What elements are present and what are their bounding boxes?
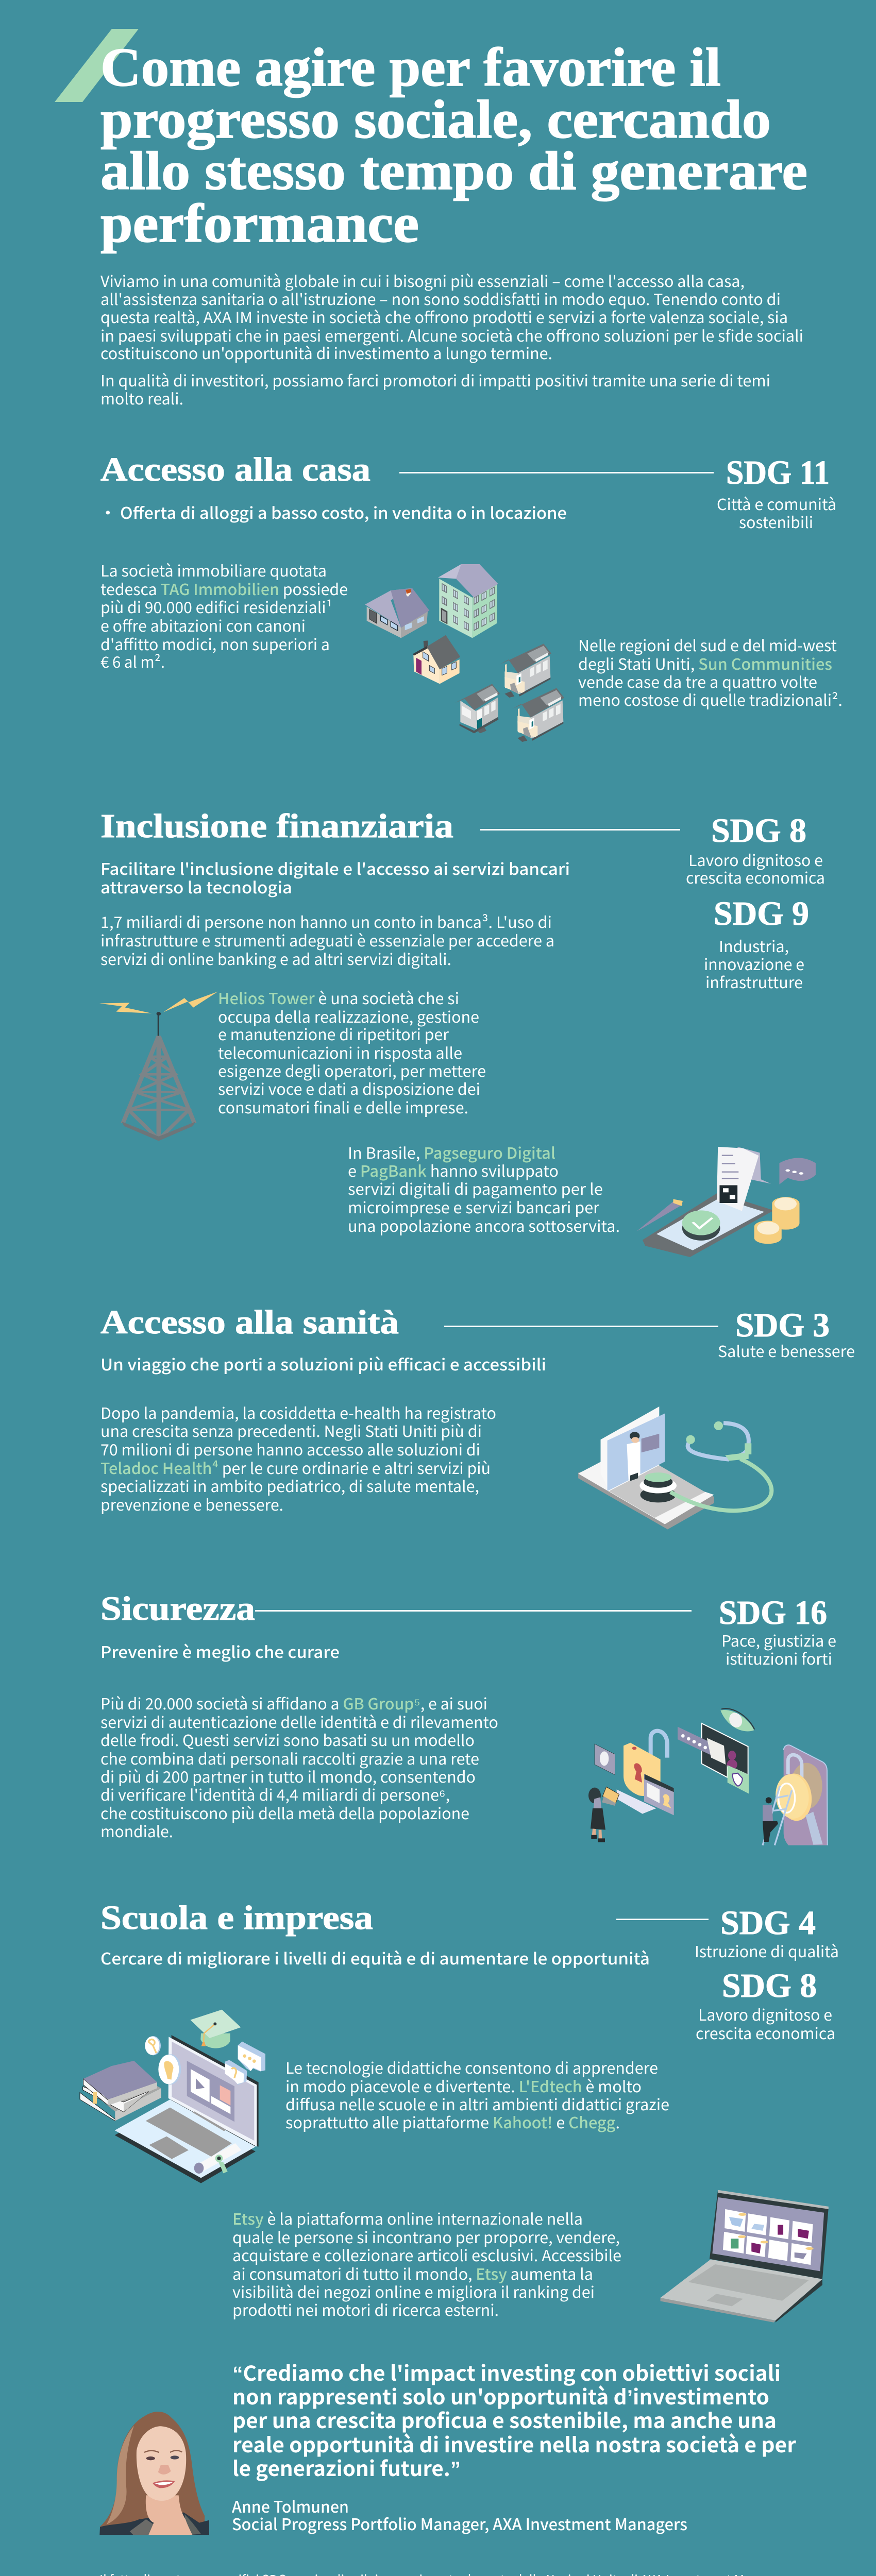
text block: Etsy: Etsy è la piattaforma online internazionale nella xyxy=(232,2207,583,2229)
text block: intro: servizi di online banking e ad altri servizi digitali. xyxy=(100,947,451,970)
text block: Pagseguro: e PagBank hanno sviluppato xyxy=(348,1159,559,1181)
tiny houses xyxy=(499,643,551,698)
quote text: per una crescita proficua e sostenibile, ma anche una xyxy=(232,2404,777,2434)
text block: Etsy xyxy=(232,2207,621,2320)
heading: Scuola e impresa xyxy=(100,1899,373,1937)
title xyxy=(100,37,807,253)
text block: TAG Immobilien xyxy=(100,558,348,672)
icon: houses xyxy=(365,564,564,742)
text block: Etsy: ai consumatori di tutto il mondo, Etsy aumenta la xyxy=(232,2262,593,2284)
text block: Teladoc Health⁴ per le cure ordinarie e altri servizi più xyxy=(100,1456,491,1479)
eye xyxy=(720,1710,754,1731)
text block: una crescita senza precedenti. Negli Stati Uniti più di xyxy=(100,1419,482,1442)
text block: edtech: Le tecnologie didattiche consentono di apprendere xyxy=(285,2056,658,2078)
title: Come agire per favorire il xyxy=(100,37,721,97)
sdg label: Città e comunità xyxy=(717,492,836,515)
text block: edtech: soprattutto alle piattaforme Kahoot! e Chegg. xyxy=(285,2110,620,2133)
sdg label: sostenibili xyxy=(739,510,813,533)
books xyxy=(80,2093,115,2121)
text block: Sun Communities xyxy=(578,633,843,710)
quote text: reale opportunità di investire nella nostra società e per xyxy=(232,2429,797,2459)
text block: Più di 20.000 società si affidano a GB Group⁵, e ai suoi xyxy=(100,1691,487,1714)
intro text: Viviamo in una comunità globale in cui i bisogni più essenziali – come l'accesso alla casa, xyxy=(100,269,745,292)
portrait xyxy=(99,2412,209,2535)
text block: Sun Communities: meno costose di quelle tradizionali². xyxy=(578,688,843,710)
attribution: Social Progress Portfolio Manager, AXA Investment Managers xyxy=(232,2512,687,2535)
sdg label: SDG 9 xyxy=(704,895,809,993)
sdg label: Pace, giustizia e xyxy=(721,1629,836,1651)
text block: Etsy: quale le persone si incontrano per proporre, vendere, xyxy=(232,2225,620,2248)
text block: intro xyxy=(100,910,554,970)
subheading: Prevenire è meglio che curare xyxy=(100,1639,340,1663)
attribution: Anne Tolmunen xyxy=(232,2494,349,2517)
text block: Pagseguro xyxy=(348,1141,620,1236)
heading: Accesso alla casa xyxy=(100,451,370,488)
padlock xyxy=(651,1731,667,1758)
sdg label: SDG 8: Lavoro dignitoso e xyxy=(688,848,823,871)
quote text: le generazioni future.” xyxy=(232,2452,461,2482)
text block: Helios Tower: occupa della realizzazione, gestione xyxy=(218,1005,479,1027)
sdg label: SDG 9: innovazione e xyxy=(704,952,804,975)
fingerprint card xyxy=(595,1744,615,1775)
text block: TAG Immobilien: più di 90.000 edifici residenziali¹ xyxy=(100,595,332,618)
heading: Accesso alla sanità xyxy=(100,1303,399,1341)
text block: specializzati in ambito pediatrico, di salute mentale, xyxy=(100,1474,479,1497)
sdg label: SDG 9: SDG 9 xyxy=(714,895,809,933)
sdg label: SDG 9: infrastrutture xyxy=(705,970,803,993)
quote text: non rappresenti solo un'opportunità d ’investimento xyxy=(232,2381,769,2411)
text block: TAG Immobilien: e offre abitazioni con canoni xyxy=(100,614,306,636)
icon: phone payment xyxy=(637,1147,816,1257)
diploma xyxy=(197,2143,241,2172)
text block: TAG Immobilien: tedesca TAG Immobilien possiede xyxy=(100,577,348,600)
text block: delle frodi. Questi servizi sono basati su un modello xyxy=(100,1728,475,1751)
icon: telecom tower xyxy=(99,992,218,1141)
text block: di verificare l'identità di 4,4 miliardi di persone⁶, xyxy=(100,1783,450,1805)
sdg label: SDG 9: Industria, xyxy=(719,934,789,957)
text block: Helios Tower: esigenze degli operatori, per mettere xyxy=(218,1059,486,1081)
text block: Dopo la pandemia, la cosiddetta e-health ha registrato xyxy=(100,1401,496,1423)
sdg label: SDG 8: SDG 8 xyxy=(722,1967,817,2005)
sdg label: SDG 4: SDG 4 xyxy=(720,1904,816,1942)
text block: Helios Tower: consumatori finali e delle imprese. xyxy=(218,1095,468,1118)
text block: Pagseguro: servizi digitali di pagamento per le xyxy=(348,1177,603,1199)
text block: Sun Communities: degli Stati Uniti, Sun Communities xyxy=(578,652,832,674)
intro text: in paesi sviluppati che in paesi emergenti. Alcune società che offrono soluzioni per le sfide sociali xyxy=(100,324,803,346)
text block: intro: infrastrutture e strumenti adeguati è essenziale per accedere a xyxy=(100,928,554,951)
quote text xyxy=(232,2357,797,2482)
text block: mondiale. xyxy=(100,1819,173,1842)
sdg label: Salute e benessere xyxy=(718,1339,855,1362)
text block: Etsy: prodotti nei motori di ricerca esterni. xyxy=(232,2298,499,2320)
sdg label: istituzioni forti xyxy=(726,1647,832,1669)
text block: edtech: diffusa nelle scuole e in altri ambienti didattici grazie xyxy=(285,2092,669,2115)
text block: Helios Tower: telecomunicazioni in risposta alle xyxy=(218,1041,462,1063)
subheading: attraverso la tecnologia xyxy=(100,875,292,898)
subheading: Cercare di migliorare i livelli di equità e di aumentare le opportunità xyxy=(100,1946,650,1969)
laptop base xyxy=(115,2104,256,2183)
text block: Etsy: visibilità dei negozi online e migliora il ranking dei xyxy=(232,2280,595,2302)
sdg label: SDG 8 xyxy=(696,1967,835,2044)
laptop screen xyxy=(171,2035,259,2147)
sdg label: SDG 8: SDG 8 xyxy=(711,812,806,850)
text block: edtech xyxy=(285,2056,669,2133)
heading: Inclusione finanziaria xyxy=(100,807,453,845)
text block: Etsy: acquistare e collezionare articoli esclusivi. Accessibile xyxy=(232,2243,621,2266)
text block: Helios Tower: Helios Tower è una società che si xyxy=(218,986,459,1009)
subheading: • Offerta di alloggi a basso costo, in vendita o in locazione xyxy=(99,500,567,523)
icon: green slash xyxy=(55,29,139,102)
text block: Pagseguro: microimprese e servizi bancari per xyxy=(348,1195,599,1218)
text block: che combina dati personali raccolti grazie a una rete xyxy=(100,1747,479,1769)
profile window xyxy=(644,1774,674,1815)
sdg label: SDG 16 xyxy=(719,1594,827,1632)
intro text: questa realtà, AXA IM investe in società che offrono prodotti e servizi a forte valenza sociale, sia xyxy=(100,305,788,328)
text block: intro: 1,7 miliardi di persone non hanno un conto in banca³. L'uso di xyxy=(100,910,552,933)
text block: di più di 200 partner in tutto il mondo, consentendo xyxy=(100,1765,476,1787)
text block xyxy=(100,1401,496,1515)
woman with tablet xyxy=(588,1788,601,1803)
sdg label: SDG 8: Lavoro dignitoso e xyxy=(698,2003,832,2025)
quote text: “Crediamo che l'impact investing con obiettivi sociali xyxy=(232,2357,781,2387)
text block: Sun Communities: vende case da tre a quattro volte xyxy=(578,670,817,692)
title: progresso sociale, cercando xyxy=(100,89,771,149)
text block: prevenzione e benessere. xyxy=(100,1493,283,1515)
sdg label: SDG 3 xyxy=(735,1307,830,1344)
sdg label xyxy=(718,1307,855,1362)
panel: header xyxy=(55,29,807,409)
sdg label: SDG 8 xyxy=(686,812,825,888)
sdg label xyxy=(717,454,836,533)
intro text: In qualità di investitori, possiamo farci promotori di impatti positivi tramite una serie di temi xyxy=(100,368,770,391)
icon: tablet with stethoscope xyxy=(578,1406,771,1530)
attribution xyxy=(232,2494,687,2535)
bungalow xyxy=(365,588,429,638)
text block: che costituiscono più della metà della popolazione xyxy=(100,1801,469,1824)
panel: sicurezza xyxy=(100,1590,836,1845)
intro text: molto reali. xyxy=(100,386,183,409)
text block: Helios Tower: e manutenzione di ripetitori per xyxy=(218,1022,449,1045)
panel: quote xyxy=(99,2357,797,2535)
ladder and person xyxy=(763,1786,792,1845)
subheading: Un viaggio che porti a soluzioni più efficaci e accessibili xyxy=(100,1352,546,1375)
cap xyxy=(200,2033,230,2048)
sdg label: SDG 8: crescita economica xyxy=(686,866,825,888)
phone with lock xyxy=(784,1745,828,1845)
text block: TAG Immobilien: La società immobiliare quotata xyxy=(100,558,327,581)
cottage xyxy=(413,635,460,684)
heading: Sicurezza xyxy=(100,1590,255,1628)
panel: accesso alla casa xyxy=(99,451,843,742)
title: allo stesso tempo di generare xyxy=(100,141,807,201)
tall building xyxy=(438,564,498,638)
subheading: Facilitare l'inclusione digitale e l'accesso ai servizi bancari xyxy=(100,856,570,879)
sdg label: SDG 4: Istruzione di qualità xyxy=(695,1939,839,1962)
panel: accesso alla sanità xyxy=(100,1303,855,1530)
sdg label: SDG 11 xyxy=(726,454,830,492)
panel: inclusione finanziaria xyxy=(99,807,825,1257)
sdg label: SDG 8: crescita economica xyxy=(696,2021,835,2044)
intro text: all'assistenza sanitaria o all'istruzione – non sono soddisfatti in modo equo. Tenendo conto di xyxy=(100,287,781,310)
text block: Helios Tower xyxy=(218,986,486,1118)
icon: edtech laptop xyxy=(80,2010,265,2183)
password window xyxy=(702,1723,748,1777)
intro text xyxy=(100,269,803,409)
text block xyxy=(100,1691,498,1842)
panel: scuola e impresa xyxy=(80,1899,839,2323)
bubbles xyxy=(146,2036,161,2055)
title: performance xyxy=(100,193,419,253)
text block: TAG Immobilien: € 6 al m². xyxy=(100,650,165,672)
text block: Helios Tower: servizi voce e dati a disposizione dei xyxy=(218,1077,480,1099)
text block: TAG Immobilien: d'affitto modici, non superiori a xyxy=(100,632,330,655)
text block: Pagseguro: In Brasile, Pagseguro Digital xyxy=(348,1141,555,1163)
icon: digital security xyxy=(588,1708,828,1845)
intro text: costituiscono un'opportunità di investimento a lungo termine. xyxy=(100,341,552,364)
text block: 70 milioni di persone hanno accesso alle soluzioni di xyxy=(100,1437,480,1460)
sdg label: SDG 4 xyxy=(695,1904,839,1962)
icon: ecommerce laptop xyxy=(661,2190,829,2323)
text block: Pagseguro: una popolazione ancora sottoservita. xyxy=(348,1214,620,1236)
sdg label xyxy=(719,1594,836,1669)
text block: Sun Communities: Nelle regioni del sud e del mid-west xyxy=(578,633,837,656)
subheading xyxy=(100,856,570,898)
text block: edtech: in modo piacevole e divertente. L'Edtech è molto xyxy=(285,2074,642,2097)
text block: servizi di autenticazione delle identità e di rilevamento xyxy=(100,1710,498,1733)
